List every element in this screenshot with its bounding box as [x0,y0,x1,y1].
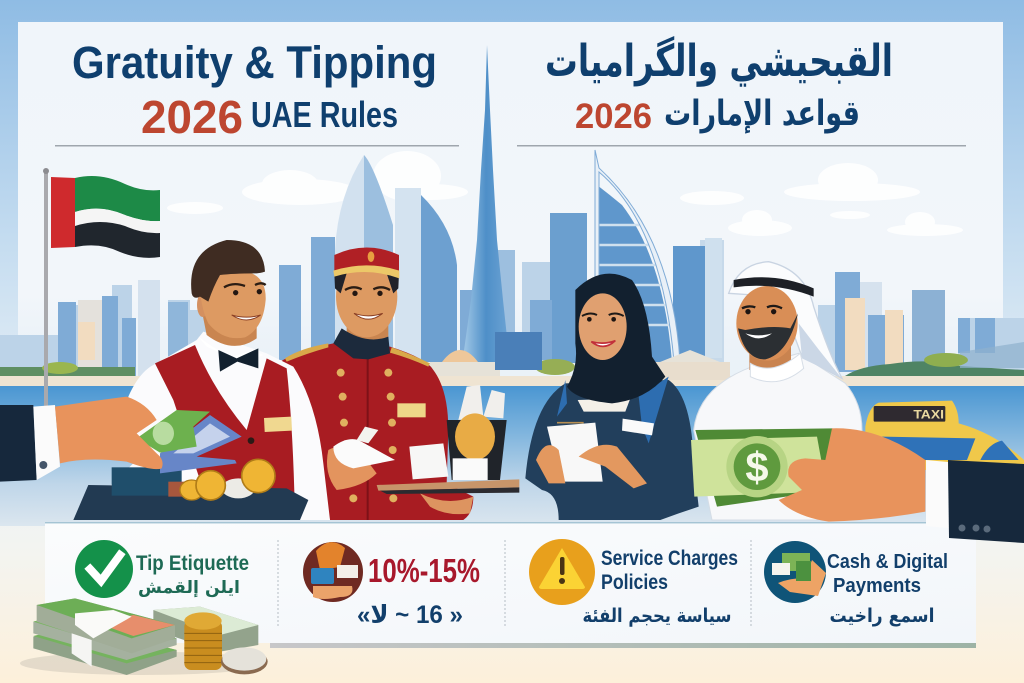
Burj Khalifa [462,45,510,365]
title rule left [55,145,459,146]
middle stack [33,610,177,667]
figures left: waiter and bellman [0,240,519,520]
tip etiquette label: Tip Etiquette [136,552,249,575]
info strip [45,522,976,643]
lower stack [33,625,177,675]
banknote: $ [745,444,769,491]
cash and digital arabic label: اسمع راخيت [830,605,934,627]
arabic title line 1: القبحيشي والگراميات [545,35,893,87]
title line 2: UAE Rules [251,94,398,135]
waiter [75,240,330,520]
percent range figure: 10%-15% [368,552,480,589]
arabic title year: 2026 [575,97,652,136]
service tray with items [377,385,519,514]
taxi [865,401,1024,470]
skyline: mid buildings [58,213,995,378]
banknote [691,428,833,507]
right sleeve cuff [926,460,1024,543]
curved blue tower [421,195,457,362]
icon: green check [75,540,133,598]
hand holding banknote [779,428,925,522]
item: cash and digital [764,541,948,627]
Emirati man [694,262,862,520]
icon: hand with cash [764,541,826,603]
service charges label: Service Charges [601,547,738,570]
arabic title line 2: قواعد الإمارات [664,94,860,134]
flag with pole [43,168,160,410]
item: service charges [529,539,738,627]
tower with curved top [335,155,393,365]
icon: hand with card [303,542,363,602]
skyline: far buildings [0,188,1024,380]
Burj Al Arab [595,150,680,362]
dividers [278,540,751,628]
title line 1: Gratuity & Tipping [72,37,437,88]
money stacks and coins [20,598,268,675]
tip etiquette arabic label: ايلن إلقمش [138,578,240,598]
icon: warning [529,539,595,605]
cash bills in hand [137,410,242,473]
title english [72,37,437,143]
hand giving tip [0,397,163,482]
taxi: TAXI [913,408,944,422]
item: tip etiquette [75,540,249,598]
policies label: Policies [601,571,668,594]
sand cream towers [78,298,903,370]
bellman [280,247,473,520]
coin stack [184,612,222,670]
cash and digital label: Cash & Digital [827,551,948,573]
percent range note: «لا‎ ~ 16 » [357,601,463,629]
figures right: server and Emirati man [525,262,1024,522]
silver coin [221,647,268,674]
top stack [37,598,175,653]
cash box and coins [73,459,308,520]
info strip shadow [270,643,976,648]
service charges arabic label: سياسة يحجم الفئة [582,605,732,627]
clouds [167,151,963,236]
title rule right [517,145,966,146]
title panel [18,22,1003,412]
water [0,386,1024,526]
title year: 2026 [141,91,243,143]
bellman hand and white bag [327,427,395,490]
shoreline and trees [0,332,1024,386]
server in hijab [525,274,699,520]
payments label: Payments [833,575,921,597]
back stack [153,607,258,652]
title arabic [545,35,893,136]
item: percent range [303,542,480,629]
